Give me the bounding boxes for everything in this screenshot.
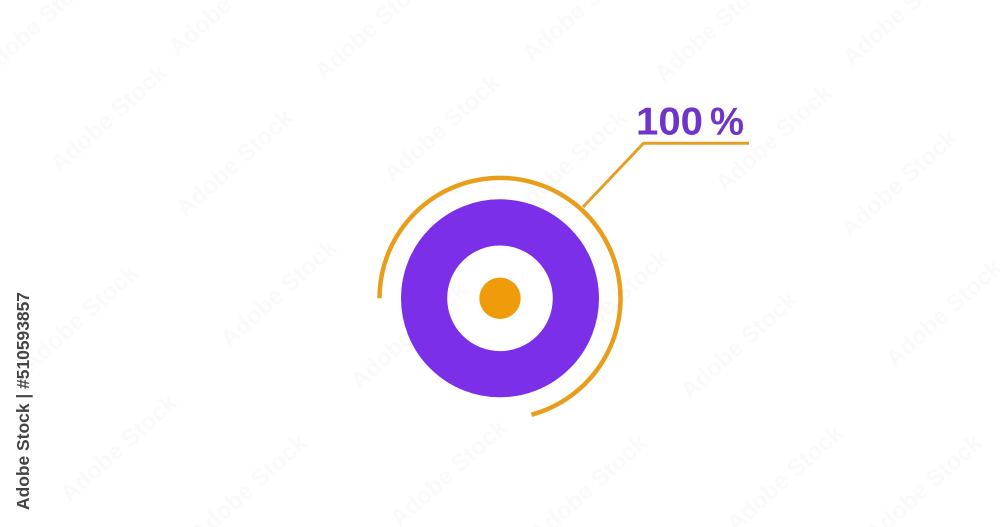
watermark pattern: Adobe Stock: [215, 234, 343, 353]
watermark pattern: Adobe Stock: [345, 276, 473, 395]
percentage label: 100: [636, 100, 703, 143]
watermark pattern: Adobe Stock: [45, 59, 173, 178]
leader line: [583, 143, 749, 207]
stock id side label: Adobe Stock | #510593857: [13, 292, 33, 510]
watermark pattern: Adobe Stock: [16, 259, 144, 378]
watermark pattern: Adobe Stock: [675, 286, 803, 405]
orange center dot: [479, 278, 521, 319]
watermark pattern: Adobe Stock: [547, 244, 675, 363]
watermark pattern: Adobe Stock: [710, 79, 838, 198]
purple donut chart: [424, 222, 576, 374]
watermark pattern: Adobe Stock: [835, 124, 963, 243]
outer orange progress arc: [380, 178, 620, 415]
watermark pattern: Adobe Stock: [378, 69, 506, 188]
watermark pattern: Adobe Stock: [171, 104, 299, 223]
watermark pattern: Adobe Stock: [55, 389, 183, 508]
percentage label: %: [710, 100, 744, 143]
watermark pattern: Adobe Stock: [505, 104, 633, 223]
percentage label: [636, 100, 744, 143]
